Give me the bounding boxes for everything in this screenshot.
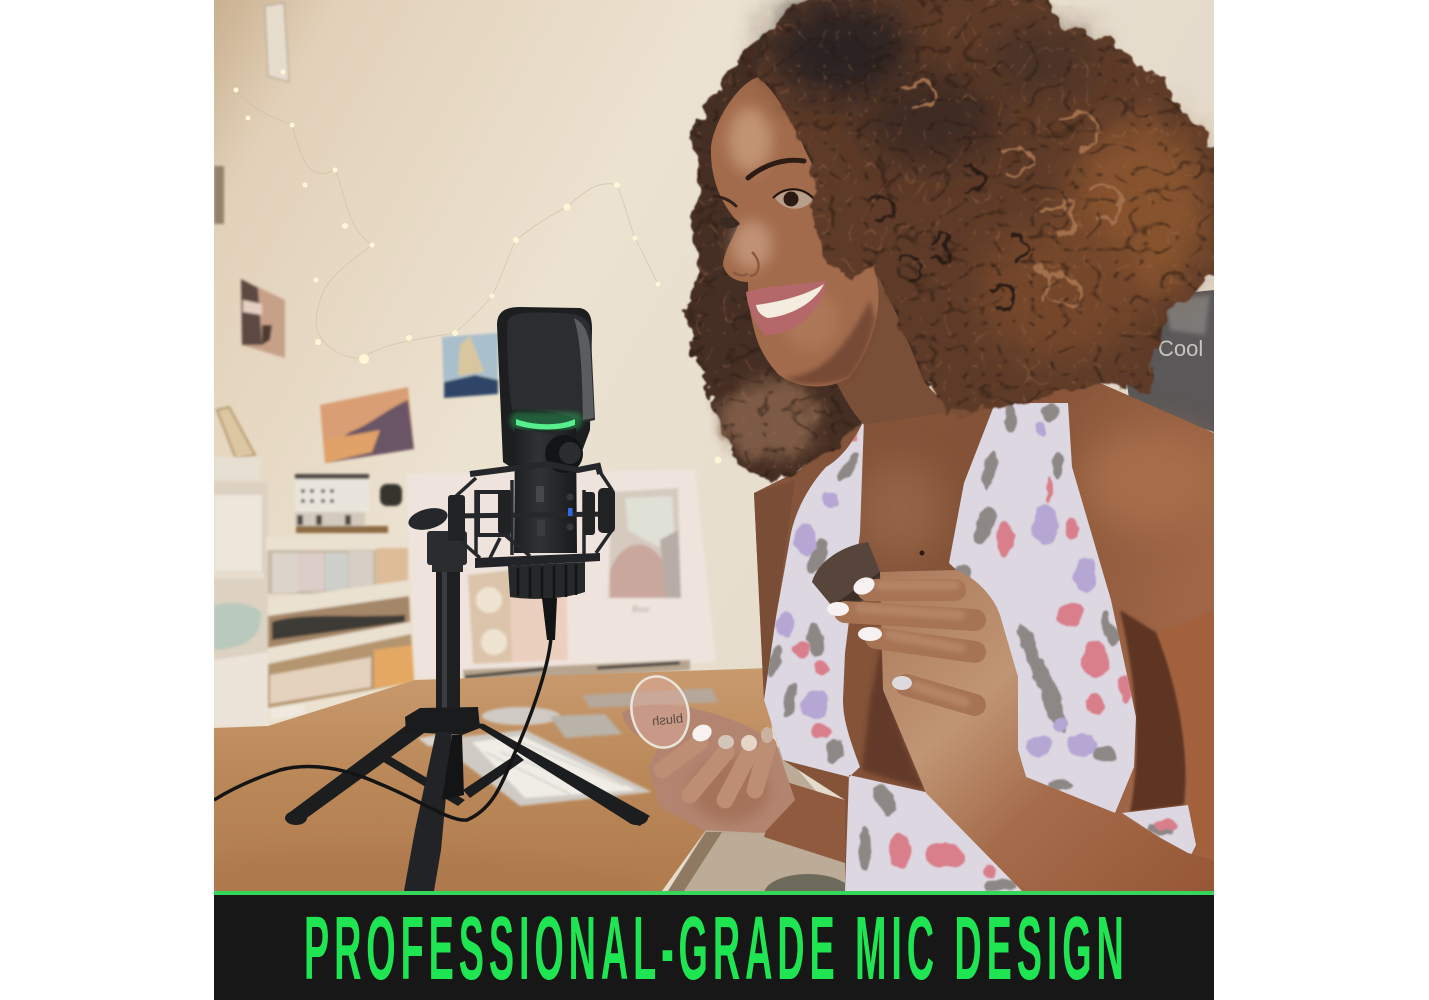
mouse: [482, 707, 560, 725]
fingers: [845, 590, 975, 705]
cleavage shade: [862, 640, 925, 790]
wall outlet plate: [265, 3, 289, 82]
eye: [775, 191, 813, 209]
photo print: sunset: [320, 387, 414, 463]
storage jars: [268, 548, 408, 594]
far eye: [718, 217, 740, 228]
jaw shadow: [785, 300, 875, 384]
left forearm: [764, 780, 845, 863]
green rule: [214, 891, 1214, 895]
brush: [812, 542, 888, 614]
right hand and forearm: [827, 570, 1214, 891]
cable: [214, 638, 551, 820]
wall background: [214, 0, 1214, 891]
middle shelf board: [268, 580, 409, 616]
mic body upper: [497, 307, 592, 470]
poster board: [406, 470, 716, 678]
shock mount: [452, 464, 612, 558]
front leg: [404, 732, 452, 891]
rear legs: [285, 722, 650, 826]
espresso machine: [295, 474, 402, 533]
compact brand text: blush: [651, 710, 684, 729]
pop filter: [507, 313, 595, 422]
trackpad: [550, 714, 622, 738]
grey chair with print: [1122, 290, 1214, 432]
fingers: [662, 742, 768, 800]
storage box: [270, 657, 371, 704]
device on desk: [582, 688, 718, 708]
photo print: portrait: [241, 279, 285, 358]
far brow: [714, 196, 736, 206]
glowing compartment: [268, 634, 414, 708]
tripod: [285, 504, 650, 891]
arm: [1157, 610, 1214, 860]
microphone: [214, 307, 615, 820]
palm shade: [690, 758, 770, 822]
hair front: [758, 0, 1225, 412]
hair back: [685, 0, 950, 480]
fairy light string: [234, 70, 722, 464]
base plate: [475, 553, 600, 568]
mount clamp: [427, 531, 467, 565]
photo print: sailboat: [442, 333, 498, 398]
pole: [436, 566, 460, 711]
top shelf board: [266, 538, 296, 550]
chair print text: Cool: [1158, 336, 1203, 361]
hair curls: [870, 82, 1122, 310]
bottom left cabinet: [214, 652, 268, 726]
small frame at left edge: [214, 166, 224, 224]
wall decorations: [214, 3, 498, 463]
photo scene: [214, 0, 1225, 914]
poster image left: [510, 596, 568, 663]
forehead highlight: [728, 108, 772, 172]
nails: [690, 722, 773, 751]
poster caption: Rose: [631, 604, 650, 614]
desk items: [418, 688, 718, 806]
floral dress: [760, 395, 1200, 895]
eyebrow: [748, 160, 804, 178]
gain knob: [545, 435, 583, 473]
side shadow: [1120, 610, 1186, 812]
keyboard: [460, 730, 652, 806]
floral print: [766, 402, 1177, 891]
torso skin: [754, 383, 1214, 891]
banner: [214, 891, 1214, 1000]
cheek tone: [782, 290, 838, 350]
face: [711, 77, 878, 387]
infographic canvas: [214, 0, 1214, 1000]
left hand: [622, 705, 795, 833]
stand tray: [462, 658, 692, 678]
wing screw: [406, 504, 450, 534]
teeth: [756, 284, 824, 318]
shelves: [214, 457, 414, 726]
chest highlight: [855, 460, 945, 560]
poster image right: [608, 488, 681, 598]
left shoulder: [754, 480, 795, 700]
woman: [622, 0, 1225, 895]
lower shelf board: [268, 622, 411, 664]
desk edge and floor: [668, 740, 850, 891]
nose shadow: [733, 252, 759, 276]
wooden frame: [217, 407, 255, 459]
shoulder highlight: [1080, 430, 1220, 530]
USB connector: [542, 598, 557, 640]
threaded ring: [508, 562, 585, 599]
nails: [827, 574, 912, 690]
tripod head: [405, 707, 480, 735]
banner title: PROFESSIONAL-GRADE MIC DESIGN: [304, 898, 1124, 999]
lips: [746, 280, 826, 335]
finger tone: [860, 585, 965, 702]
glass bowl: [214, 603, 261, 650]
control ports: [536, 486, 574, 536]
black band: [214, 895, 1214, 1000]
green LED ring: [510, 412, 582, 430]
shock mount side blocks: [448, 488, 615, 541]
mole: [920, 550, 924, 556]
mic lower body: [514, 428, 577, 553]
wooden desk: [214, 668, 845, 891]
left stack: [214, 457, 261, 480]
shelf dark items: [268, 596, 410, 648]
hair tone patches: [770, 0, 1210, 360]
clear compact: [624, 670, 696, 754]
neck: [830, 267, 995, 425]
nose highlight: [732, 221, 772, 269]
